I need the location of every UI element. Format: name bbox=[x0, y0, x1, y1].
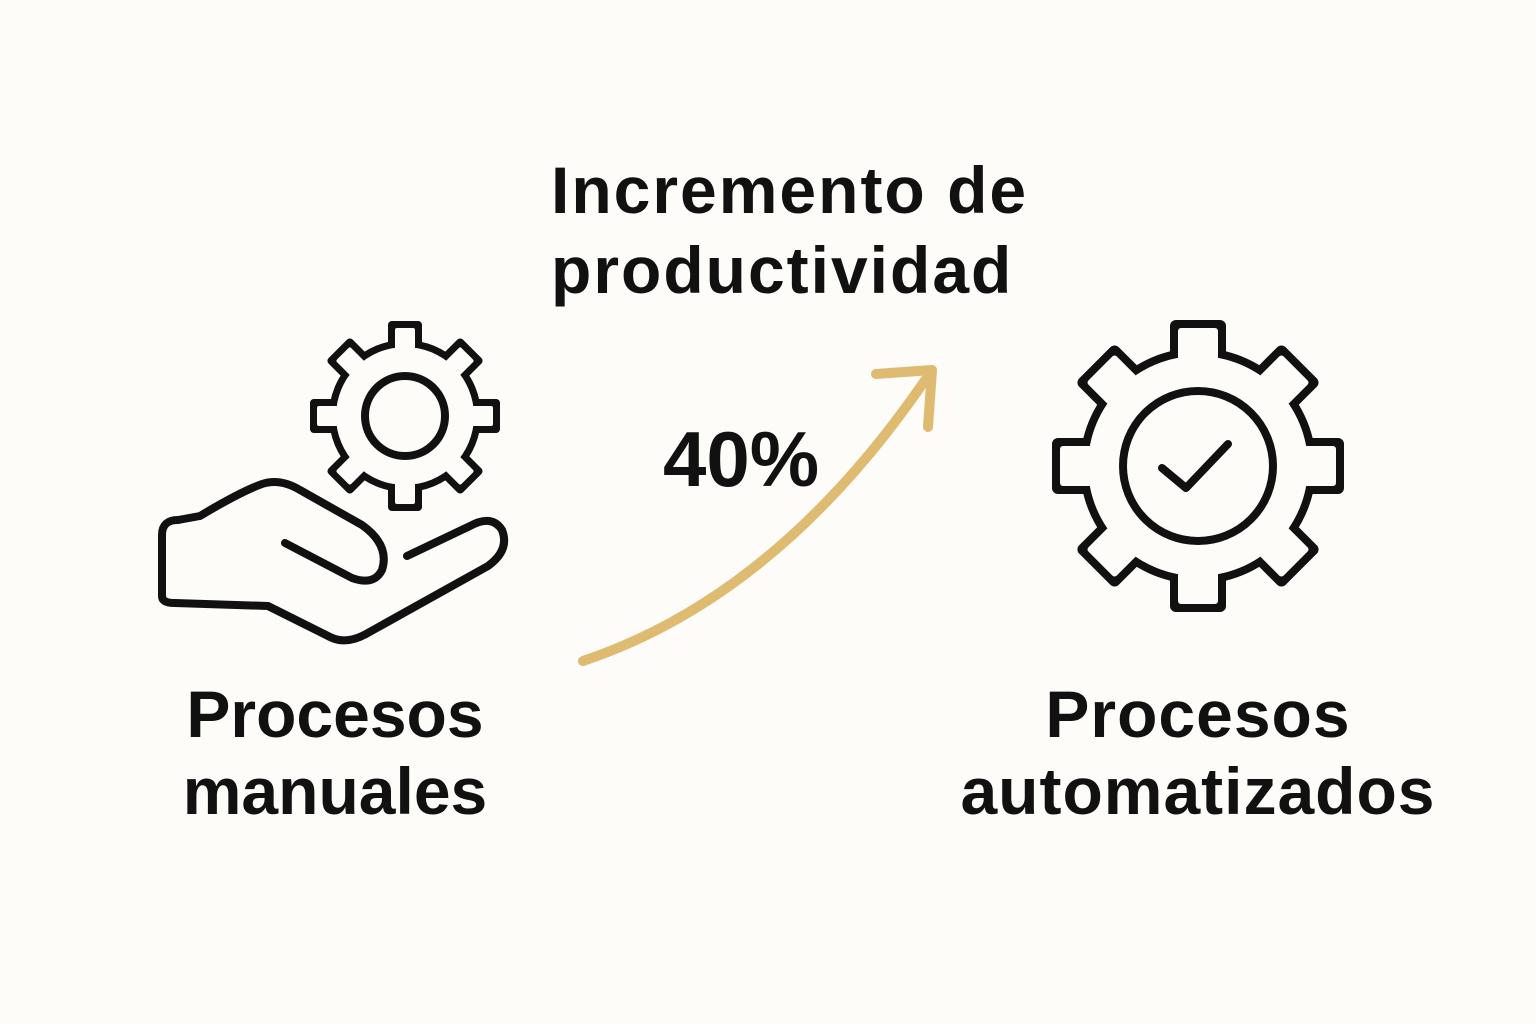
icon: automated gear with check bbox=[1052, 320, 1344, 612]
title: productividad bbox=[551, 233, 1013, 307]
label: manual processes bbox=[183, 677, 487, 828]
icon: hand with gear bbox=[162, 321, 504, 640]
label: manual processes: manuales bbox=[183, 754, 487, 828]
hand bbox=[162, 482, 504, 640]
percentage label: 40% bbox=[663, 415, 819, 503]
label: automated processes: automatizados bbox=[960, 754, 1436, 828]
arrow: growth bbox=[583, 370, 932, 661]
label: automated processes: Procesos bbox=[1045, 677, 1351, 751]
title: Incremento de bbox=[551, 153, 1028, 227]
label: manual processes: Procesos bbox=[186, 677, 484, 751]
label: automated processes bbox=[960, 677, 1436, 828]
small gear bbox=[310, 321, 500, 511]
title bbox=[551, 153, 1028, 307]
